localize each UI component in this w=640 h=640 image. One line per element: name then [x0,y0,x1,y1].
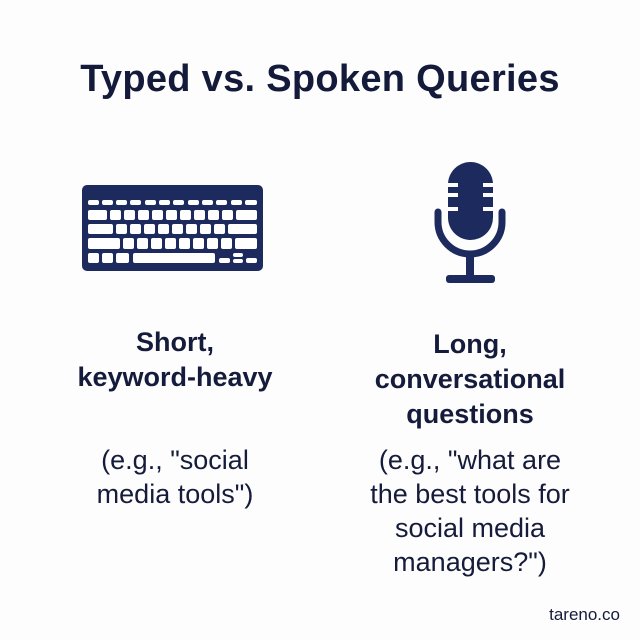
text: typed example: (e.g., "social [101,445,249,475]
footer: brand: tareno.co [549,605,620,624]
heading: typed: Short, [136,327,214,357]
heading: typed [77,327,273,392]
text: spoken example: the best tools for [370,479,570,509]
text: spoken example: managers?") [393,547,547,577]
icon: keyboard [82,185,263,271]
heading: spoken [375,329,565,429]
text: typed example: media tools") [97,479,253,509]
icon: microphone [434,162,506,283]
text: spoken example [370,445,570,577]
text: typed example [97,445,253,509]
heading: spoken: questions [406,399,534,429]
heading: spoken: Long, [433,329,507,359]
text: spoken example: social media [395,513,545,543]
heading: typed: keyword-heavy [77,362,273,392]
function row [88,200,257,205]
text: spoken example: (e.g., "what are [379,445,561,475]
heading: spoken: conversational [375,364,565,394]
title: Typed vs. Spoken Queries [80,58,560,100]
